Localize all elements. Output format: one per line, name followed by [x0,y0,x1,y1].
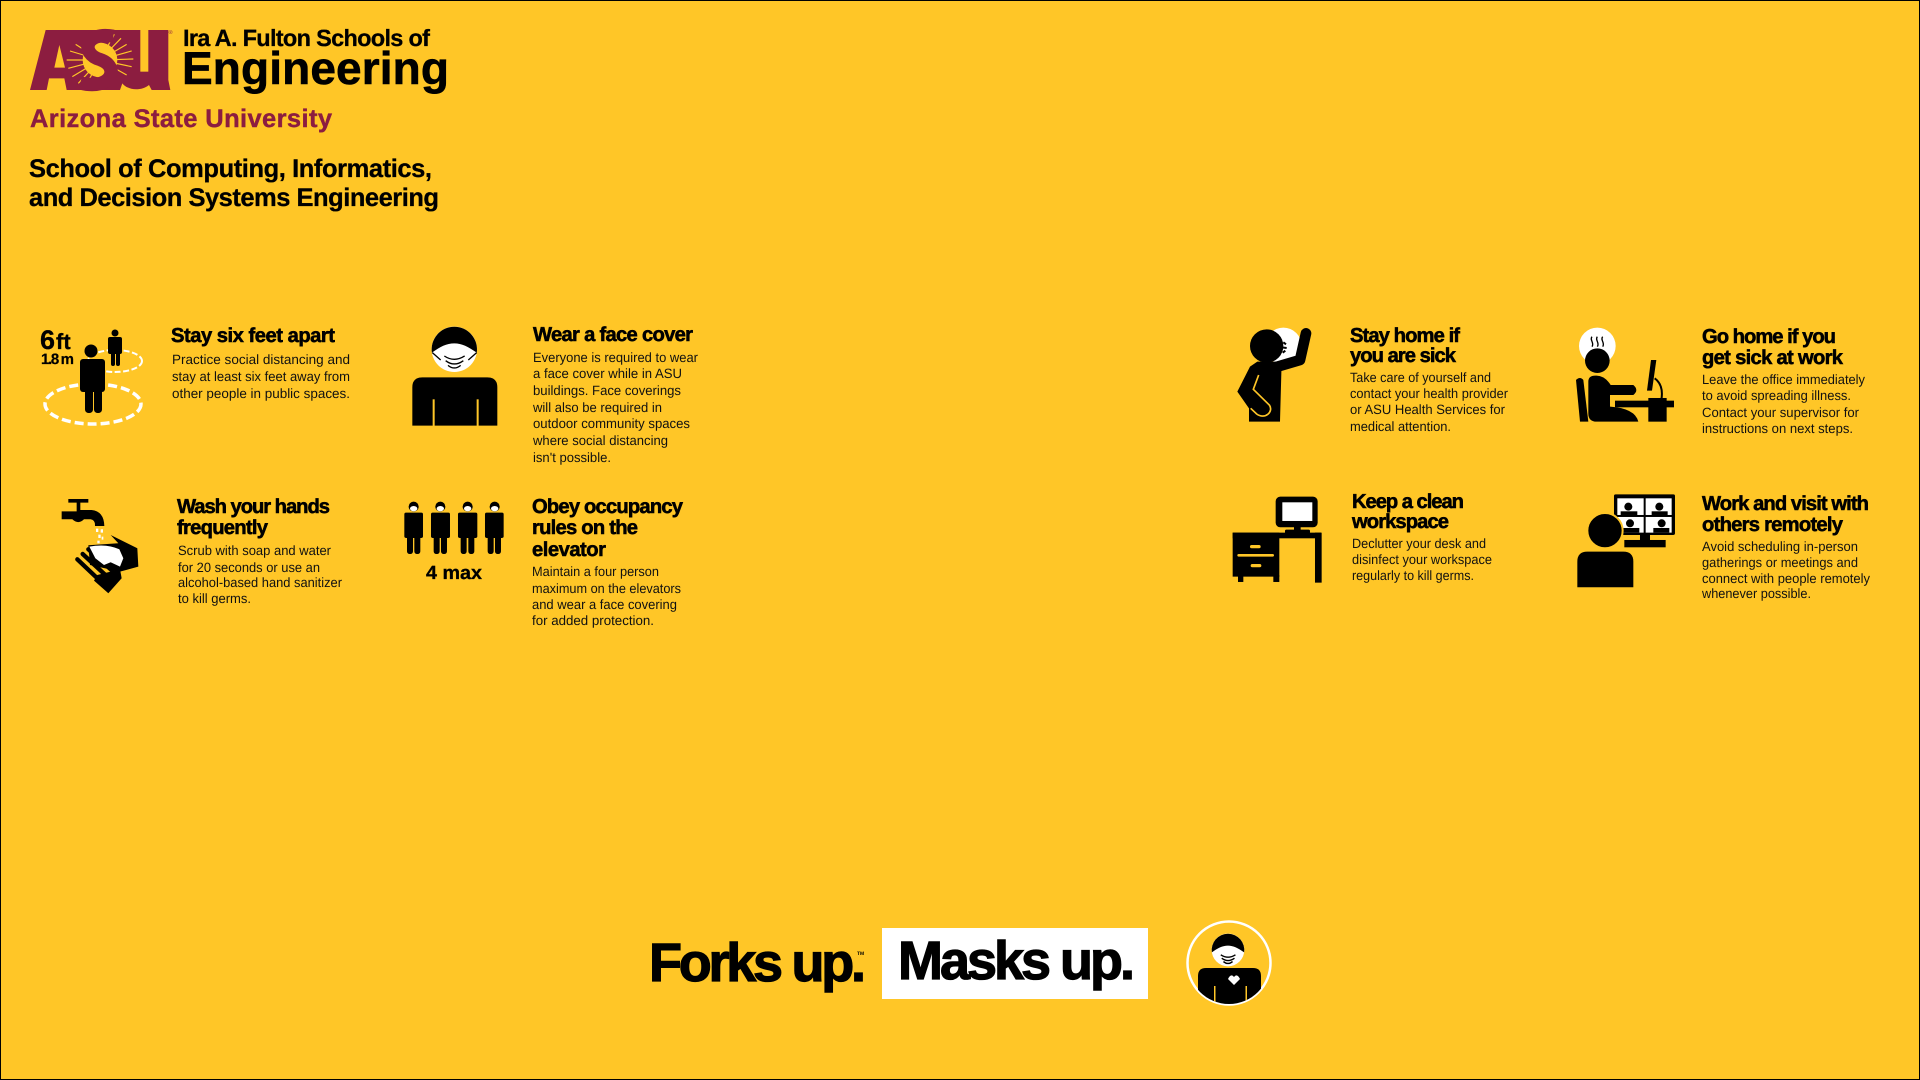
body text: a face cover while in ASU [533,366,682,381]
body text: to avoid spreading illness. [1702,388,1851,403]
body text: Leave the office immediately [1702,372,1865,387]
body text: Maintain a four person [532,564,659,579]
body text [1352,536,1492,583]
body text [172,352,350,401]
heading: workspace [1351,511,1449,533]
icon: six feet distance: 1.8 m [41,351,74,368]
slogan: Forks up: Forks up. [649,933,866,993]
icon: desk and computer [1233,497,1322,583]
body text: stay at least six feet away from [172,369,350,384]
body text: Take care of yourself and [1350,370,1491,385]
body text: instructions on next steps. [1702,421,1853,436]
body text: and wear a face covering [532,597,677,612]
heading: Stay six feet apart [171,325,335,347]
panel: go home if sick at work [1576,326,1865,436]
icon: tap and hands [62,499,138,593]
body text: contact your health provider [1350,386,1508,401]
body text [1701,539,1870,601]
heading: elevator [532,539,606,561]
school name [29,155,439,212]
icon: person with mask [412,327,497,426]
heading: rules on the [532,517,638,539]
logo: ASU sunburst [30,30,173,90]
icon: six feet distance: 6ft [40,325,71,355]
body text: regularly to kill germs. [1352,568,1474,583]
body text: buildings. Face coverings [533,383,681,398]
body text: maximum on the elevators [532,581,681,596]
header: logo and school name [29,25,449,212]
body text: Practice social distancing and [172,352,350,367]
heading [1702,326,1844,369]
logo: ASU sunburst: ® [169,30,173,35]
body text: or ASU Health Services for [1350,402,1505,417]
heading: Wash your hands [177,496,330,518]
body text: where social distancing [532,433,668,448]
logo text: Ira A. Fulton Schools of: Ira A. Fulton Schools of [183,25,430,51]
body text: for 20 seconds or use an [178,560,320,575]
icon: four people [404,502,504,554]
body text: alcohol-based hand sanitizer [178,575,342,590]
heading: Go home if you [1702,326,1836,348]
panel: keep a clean workspace [1233,491,1492,583]
body text: connect with people remotely [1702,571,1870,586]
icon: six feet distance [40,325,142,424]
body text: to kill germs. [178,591,251,606]
body text [1350,370,1508,434]
slogan: Forks up: TM [857,951,864,957]
slogan: Masks up: Masks up. [898,931,1135,991]
heading: Keep a clean [1352,491,1464,513]
body text: Avoid scheduling in-person [1702,539,1858,554]
label: 4 max: 4 max [426,563,482,584]
body text [178,543,342,606]
icon: person at video call [1577,494,1675,587]
heading: Wear a face cover [533,324,693,346]
heading: get sick at work [1702,347,1844,369]
heading: Stay home if [1350,325,1460,347]
body text: will also be required in [532,400,662,415]
school name: School of Computing, Informatics, [29,155,432,183]
school name: and Decision Systems Engineering [29,184,439,212]
icon: sick person sneezing [1237,328,1306,422]
body text: isn't possible. [533,450,611,465]
panel: obey occupancy rules [404,496,684,628]
body text [1702,372,1865,436]
panel: work and visit remotely [1577,493,1870,601]
body text: medical attention. [1350,419,1451,434]
heading: others remotely [1702,514,1844,536]
heading [532,496,684,561]
heading: you are sick [1350,345,1457,367]
heading: frequently [177,517,269,539]
heading [1702,493,1869,536]
heading [177,496,330,539]
panel: wear a face cover [412,324,698,465]
body text: outdoor community spaces [533,416,690,431]
logo text: Arizona State University: Arizona State University [30,105,333,133]
body text [532,564,681,628]
icon: masked person badge [1188,922,1270,1005]
body text: other people in public spaces. [172,386,350,401]
body text [532,350,698,465]
icon: sick worker at desk [1576,328,1674,422]
body text: Contact your supervisor for [1702,405,1859,420]
panel: stay six feet apart [40,325,350,424]
panel: stay home if sick [1237,325,1508,434]
heading [1350,325,1460,367]
panel: wash your hands [62,496,342,606]
body text: gatherings or meetings and [1702,555,1858,570]
logo text: Engineering: Engineering [182,42,449,94]
heading: Obey occupancy [532,496,684,518]
body text: whenever possible. [1701,586,1811,601]
body text: Declutter your desk and [1352,536,1486,551]
body text: disinfect your workspace [1352,552,1492,567]
heading: Work and visit with [1702,493,1869,515]
body text: Everyone is required to wear [533,350,698,365]
body text: for added protection. [532,613,654,628]
body text: Scrub with soap and water [178,543,331,558]
heading [1351,491,1464,533]
